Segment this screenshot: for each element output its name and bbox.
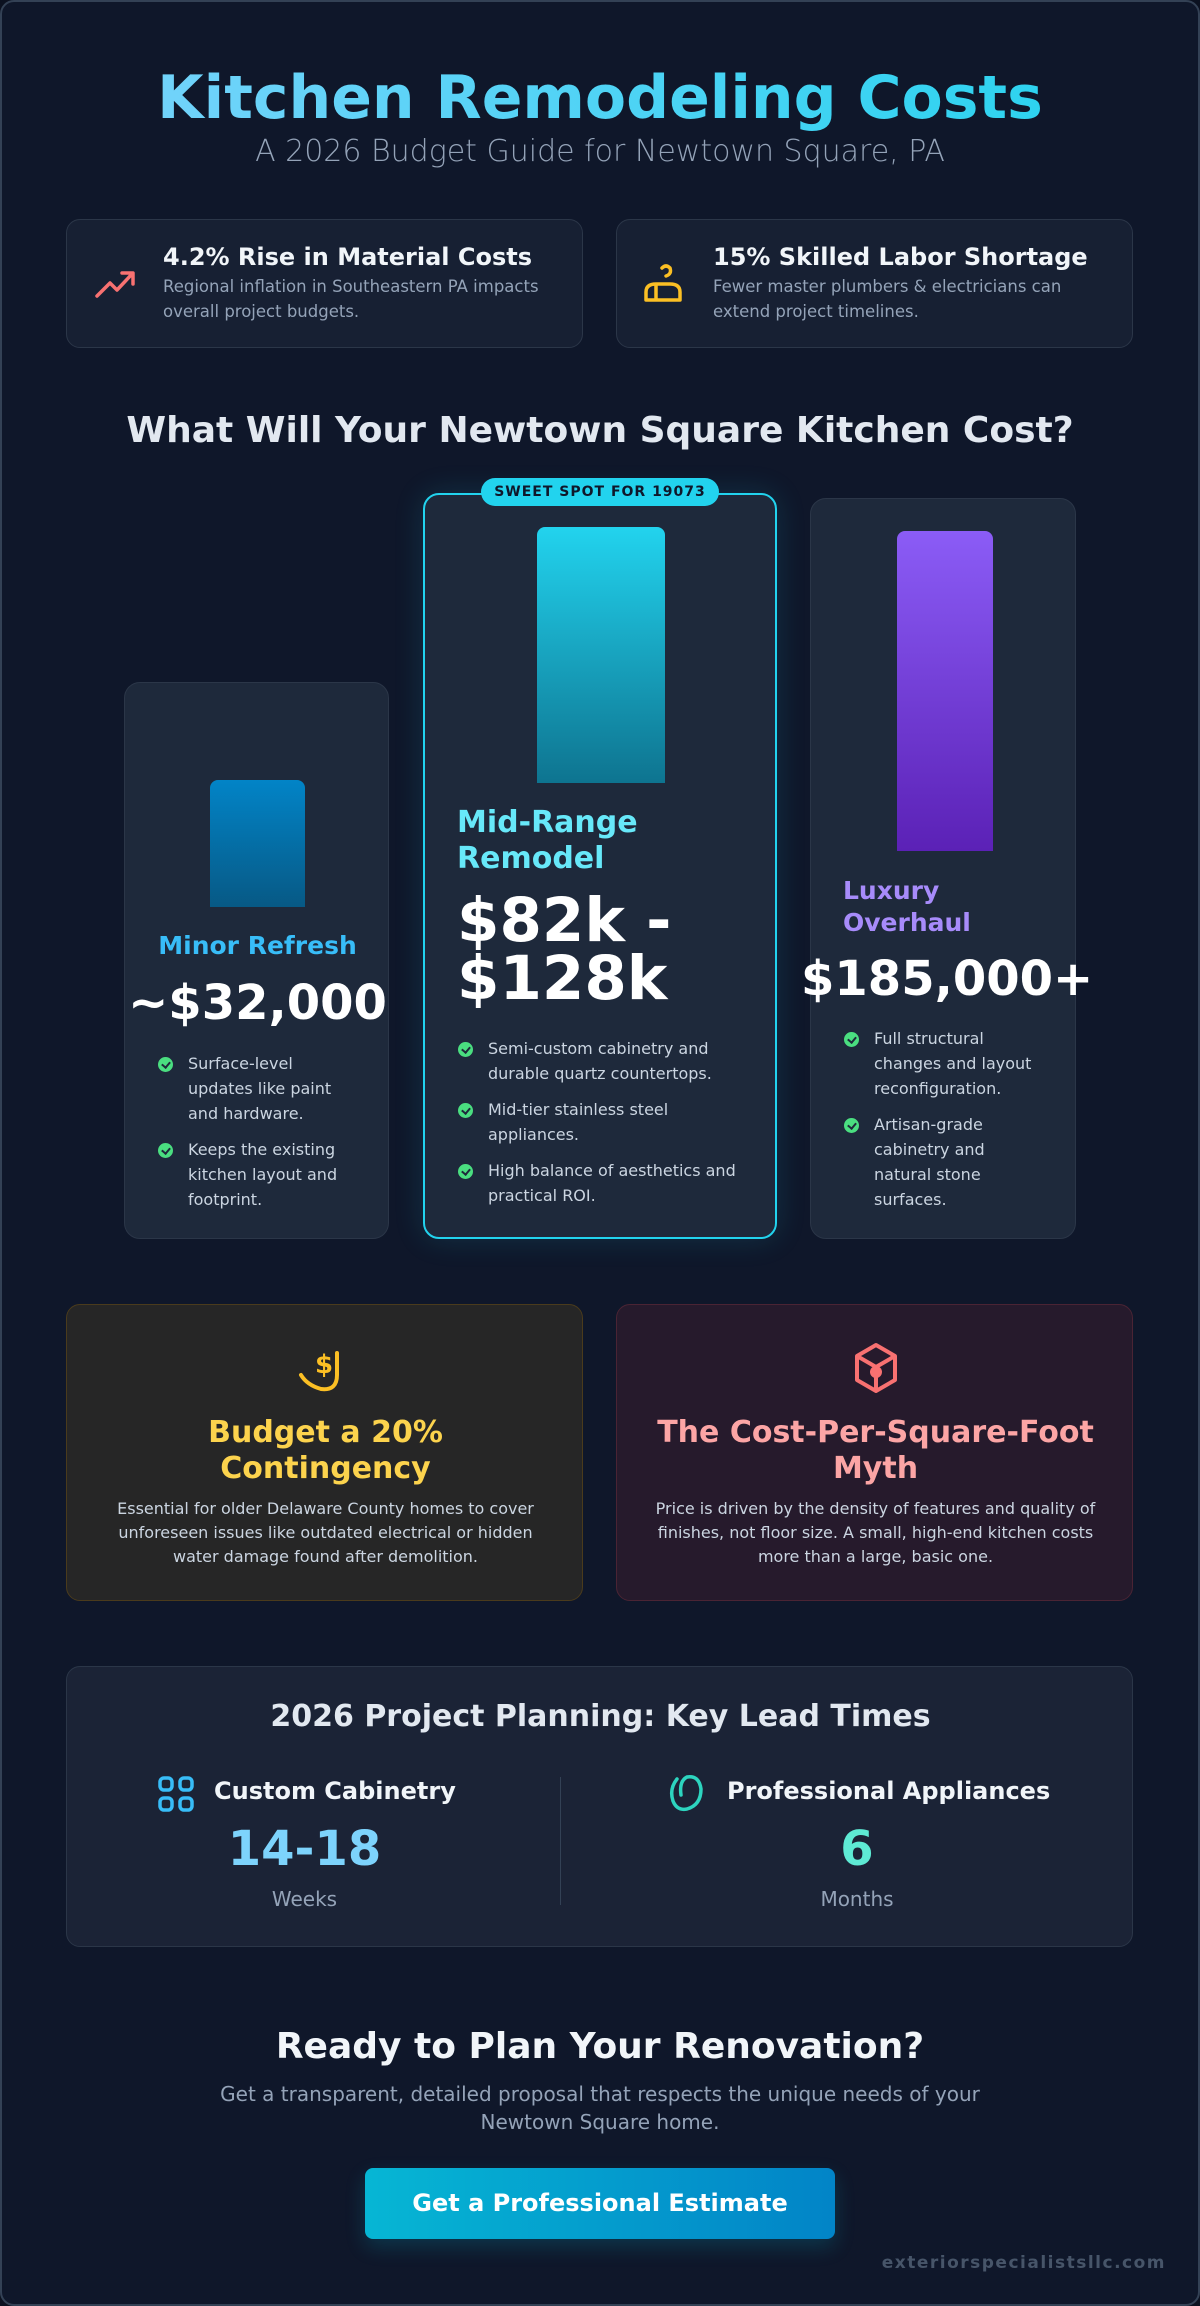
item: cabinetry: Weeks [272,1887,337,1911]
icon: loop [670,1775,703,1812]
tip title: Myth [833,1451,918,1486]
stat text [713,243,1088,321]
stat text: Fewer master plumbers & electricians can extend project timelines. [713,277,1061,321]
tip text: Price is driven by the density of features and quality of finishes, not floor size. A small, high-end kitchen costs more than a large, basic one. [656,1499,1095,1566]
feature list: High balance of aesthetics and practical ROI. [488,1161,736,1205]
feature list: Full structural changes and layout reconfiguration. [874,1029,1031,1098]
badge: sweet spot [481,478,719,506]
panel: luxury [810,498,1076,1239]
price [457,885,671,1014]
item: appliances [670,1775,1050,1911]
price: ~$32,000 [128,975,387,1031]
panel: minor refresh [124,682,389,1239]
feature list: Keeps the existing kitchen layout and footprint. [188,1140,337,1209]
item: appliances: 6 [840,1821,874,1877]
tip title [208,1415,443,1486]
tip card: contingency [66,1304,583,1601]
price: $185,000+ [801,951,1093,1007]
cta button: Get a Professional Estimate [412,2189,788,2217]
item: cabinetry: 14-18 [228,1821,381,1877]
feature list: Artisan-grade cabinetry and natural stone surfaces. [874,1115,985,1209]
icon: worker [644,264,682,302]
tip card: sqft myth [616,1304,1133,1601]
footer url: exteriorspecialistsllc.com [882,2253,1166,2273]
bar: mid [537,527,665,783]
tier name [843,876,971,937]
tier name: Minor Refresh [158,931,357,960]
feature list [458,1039,736,1205]
title: Kitchen Remodeling Costs [157,63,1043,133]
cta text: Get a transparent, detailed proposal that respects the unique needs of your Newtown Square home. [220,2082,980,2134]
tip title [657,1415,1094,1486]
badge: sweet spot: SWEET SPOT FOR 19073 [494,484,706,500]
item: appliances: Professional Appliances [727,1777,1050,1805]
icon: money hand [298,1350,339,1392]
stat text: 4.2% Rise in Material Costs [163,243,532,271]
stat text: 15% Skilled Labor Shortage [713,243,1088,271]
lead times heading: 2026 Project Planning: Key Lead Times [270,1699,931,1734]
subtitle: A 2026 Budget Guide for Newtown Square, PA [255,134,945,169]
feature list: Semi-custom cabinetry and durable quartz countertops. [488,1039,712,1083]
feature list: Mid-tier stainless steel appliances. [488,1100,668,1144]
icon: money hand: $ [315,1350,333,1380]
tier name [457,805,638,876]
bar: minor [210,780,305,907]
feature list: Surface-level updates like paint and hardware. [188,1054,331,1123]
stat text [163,243,539,321]
bar: luxury [897,531,993,851]
tip title: Budget a 20% [208,1415,443,1450]
tier name: Overhaul [843,908,971,937]
title [0,58,1200,138]
tip title: Contingency [220,1451,431,1486]
panel: mid-range [423,493,777,1239]
cta heading: Ready to Plan Your Renovation? [276,2026,924,2067]
feature list [844,1029,1031,1209]
stat text: Regional inflation in Southeastern PA impacts overall project budgets. [163,277,539,321]
tip title: The Cost-Per-Square-Foot [657,1415,1094,1450]
icon: cube [855,1343,897,1393]
price: $82k - [457,885,671,956]
tip text: Essential for older Delaware County homes to cover unforeseen issues like outdated electrical or hidden water damage found after demolition. [117,1499,534,1566]
icon: grid [158,1776,194,1812]
feature list [158,1054,337,1209]
item: cabinetry [158,1776,456,1911]
icon: trend up [95,271,135,298]
tier name: Mid-Range [457,805,638,840]
tier name: Luxury [843,876,939,905]
panel: lead times [66,1666,1133,1947]
cta button [365,2168,835,2239]
stat card: material costs [66,219,583,348]
tier name: Remodel [457,841,604,876]
section heading: What Will Your Newtown Square Kitchen Cost? [126,410,1074,451]
stat card: labor shortage [616,219,1133,348]
price: $128k [457,943,667,1014]
item: cabinetry: Custom Cabinetry [214,1777,456,1805]
item: appliances: Months [820,1887,894,1911]
